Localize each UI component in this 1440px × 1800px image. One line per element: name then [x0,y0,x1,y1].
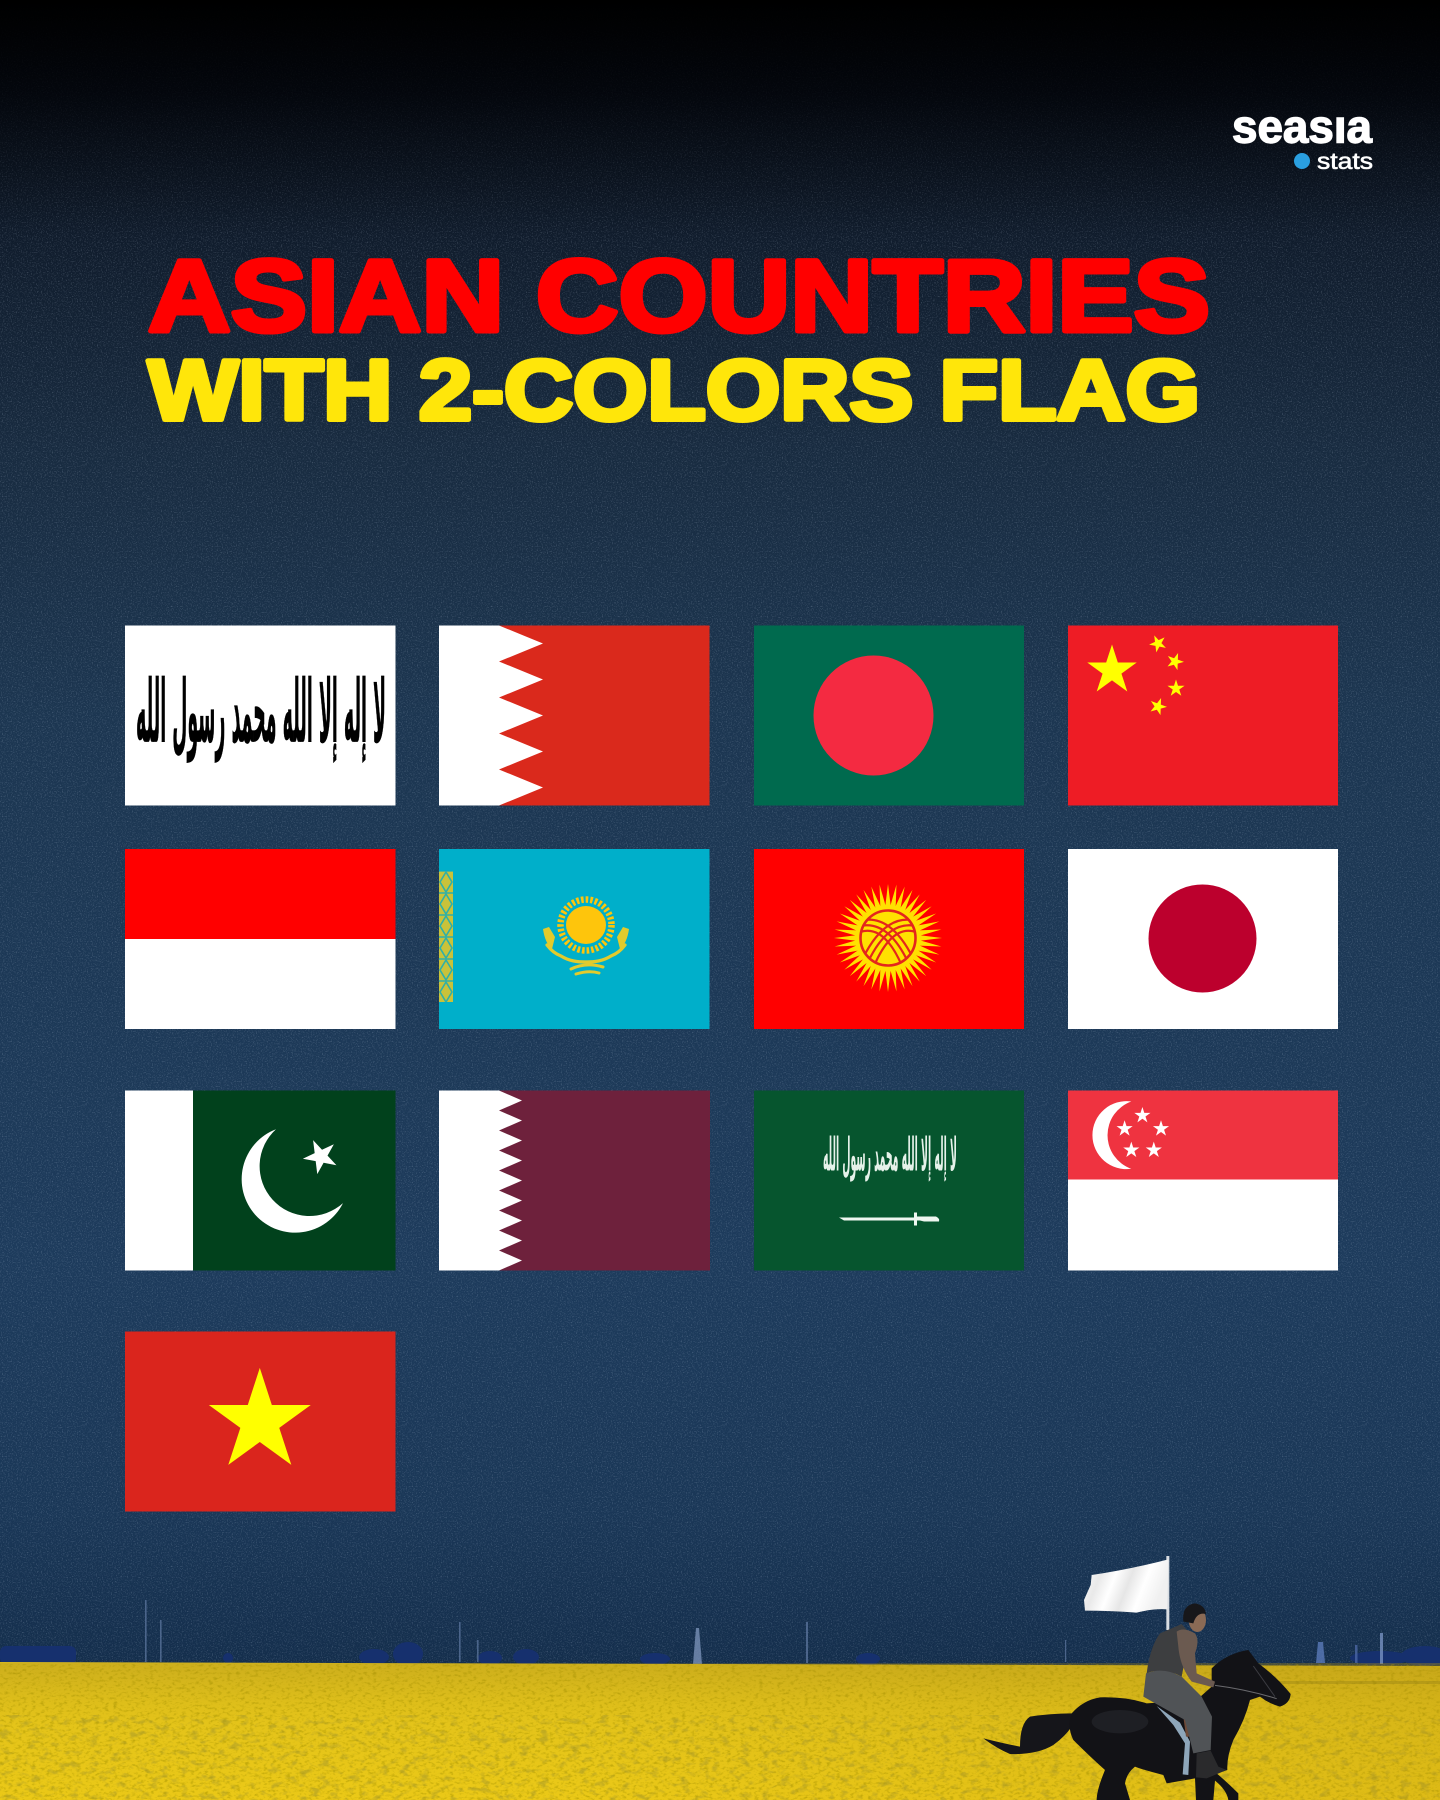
yellow rapeseed field [0,1662,1440,1800]
flag: Bangladesh [754,626,1024,806]
rider with white flag on black horse [983,1556,1291,1800]
flag: Japan [1068,849,1338,1029]
title: ASIAN COUNTRIES [148,239,1210,353]
horizon: distant trees and pylons [0,1600,1440,1666]
rider [1143,1603,1277,1778]
infographic canvas: لا إله إلا الله محمد رسول الله [823,1128,957,1182]
logo: seasia stats: seasia [1232,100,1372,152]
flag: Saudi Arabia [754,1090,1024,1270]
white flag on pole [1084,1556,1169,1630]
flag: Afghanistan [125,626,396,806]
flag: Pakistan [125,1090,396,1270]
title [148,239,1210,438]
flag: Singapore [1068,1090,1338,1270]
logo: seasia stats [1232,116,1373,170]
flag: Kyrgyzstan [754,849,1024,1029]
title: WITH 2-COLORS FLAG [148,344,1200,438]
saddle cloth [1157,1706,1193,1775]
black horse [983,1650,1291,1800]
logo: seasia stats: stats [1317,148,1373,174]
flag: China [1068,626,1338,806]
flag: Bahrain [439,626,710,806]
flag: Indonesia [125,849,396,1029]
flag: Qatar [439,1090,710,1270]
flag: Kazakhstan [439,849,710,1029]
flag: Vietnam [125,1332,396,1512]
infographic canvas: لا إله إلا الله محمد رسول الله [136,661,386,763]
